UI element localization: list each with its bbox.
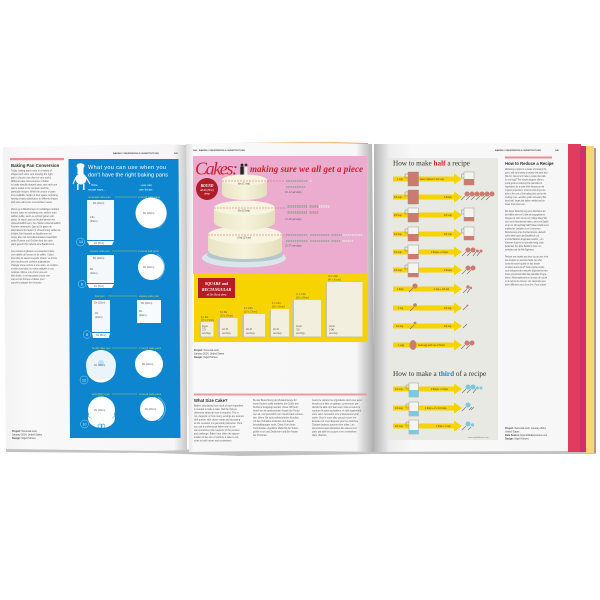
center page article: parts par taille en pouces et en centimètres bbox=[312, 430, 357, 434]
badge: round: all 2in (5cm) bbox=[200, 189, 214, 192]
row: rectangle pan to 2 round pans: 14 bbox=[79, 240, 83, 244]
left page article: to make specific-shaped pans, and each one bbox=[11, 184, 58, 186]
row: 1/4 cup third: 1/4 cup bbox=[395, 425, 404, 428]
center page article: Avant de calculer les ingrédients dont vous avez bbox=[312, 399, 363, 402]
left page article: une variété de formes et de tailles. Il peut bbox=[11, 254, 54, 256]
cake box: 9x9: 40-45 bbox=[246, 328, 253, 331]
left page article: and sizes will cover most kitchen needs. bbox=[11, 201, 53, 204]
illustration: three-tier cake: 10in (25cm) bbox=[237, 236, 251, 240]
row: square pan to round pan: 2 round loaf pans bbox=[138, 249, 159, 253]
left page article: passt. Je nach Land und Kultur werden sie bbox=[11, 218, 56, 222]
center page article: and challenge. Baker here offers the approx- bbox=[194, 432, 240, 436]
row: bundt pan to round pans: 2 round cake pans bbox=[139, 346, 162, 350]
right page article: Réduire une recette par deux ou par trois n'est bbox=[505, 255, 549, 259]
row: loaf pan to square pan: (20cm) bbox=[139, 314, 147, 317]
row: rectangle pan to 2 round pans: 13in bbox=[90, 216, 95, 219]
right page bbox=[374, 143, 568, 452]
right page article: How to Reduce a Recipe bbox=[505, 161, 554, 166]
cake box: 8x12: 40-45 bbox=[273, 328, 280, 331]
blue panel title: What you can use when you bbox=[88, 165, 166, 171]
right page article: et du temps de cuisson, une casserole peut bbox=[505, 280, 546, 283]
left page article: riesig, aber mit Grundkenntnissen beachtlich bbox=[11, 236, 58, 239]
cake box: 8x12: servings bbox=[273, 332, 282, 335]
right page article: sorgt um 10 beschlägt hält? Diese Grafik ist ein bbox=[505, 224, 550, 227]
right page article: point, and so knowing to reduce the pans and bbox=[505, 171, 548, 175]
right page article: doses proportionnelles des quantités d'ingré- bbox=[505, 273, 547, 276]
row: 1 egg bbox=[393, 340, 474, 350]
right page article: ingredients for a cake while keeping to the bbox=[505, 185, 545, 189]
row: square pan to round pan: 8in bbox=[90, 268, 94, 271]
center page article: Bei der Berechnung der Zutatenmenge für bbox=[253, 399, 297, 402]
row: square pan to round pan: 8in (20cm) bbox=[93, 257, 104, 260]
left page article: vue sur les formes et tailles pour bbox=[11, 278, 45, 281]
row: bundt pan to round pans: 12 bbox=[82, 378, 86, 382]
center page article: Bakers calculating how much of each ingredient bbox=[194, 404, 244, 408]
left page article: couvrir la plupart des besoins. bbox=[11, 282, 42, 284]
cake box: 8x12: (20 x 30cm) bbox=[272, 306, 285, 308]
icon: chef bbox=[73, 163, 90, 190]
center page bbox=[186, 142, 375, 452]
center page article: not, depends on how many servings are desired, bbox=[194, 415, 245, 418]
right page article: aider différents vous d'une fine. Pour cuisine. bbox=[505, 283, 547, 287]
row: springform pan to round pans: 2 round cake pans bbox=[139, 392, 162, 396]
center page credits bbox=[194, 349, 225, 359]
top coloured page edge bbox=[238, 142, 368, 145]
row: springform pan to round pans: 9in (23cm) bbox=[145, 408, 156, 411]
right page article: vorhalten auf die Alle Eigentum. bbox=[505, 248, 535, 252]
left page article: pan to choose can often be very useful. bbox=[11, 176, 52, 180]
cake box: 8x8: (20 x 20cm) bbox=[220, 314, 233, 318]
panel: round cakes bbox=[193, 156, 367, 273]
row: 1/3 cup: 1/3 cup bbox=[394, 251, 403, 254]
row: 1/4 cup: 2 tbsps bbox=[444, 269, 453, 272]
row: bundt pan to round pans: 9in (23cm) bbox=[94, 364, 105, 367]
row: 1/3 cup third bbox=[393, 402, 474, 416]
row: 1 egg: 1 egg bbox=[398, 344, 405, 347]
cake box: 11x15: about bbox=[296, 325, 302, 328]
row: loaf pan to square pan: (23cm) bbox=[95, 316, 103, 319]
cake box: 16x24: (41 x 61cm) bbox=[328, 278, 341, 282]
badge: square and rectangular: RECTANGULAR bbox=[202, 287, 232, 292]
right page article: comment savoir quand on faut diviser bbox=[505, 262, 540, 266]
left page header: BAKING CONVERSIONS & SUBSTITUTIONS bbox=[113, 153, 159, 155]
badge: round: deep bbox=[204, 192, 210, 196]
right page article: able to the cost of the baking that can be the bbox=[505, 192, 547, 196]
center page article: sizes in both inches and centimeters. bbox=[194, 440, 233, 442]
badge: round bbox=[196, 178, 218, 200]
right page article: die Hälfte oder ein Drittel der angegebenen bbox=[505, 213, 546, 217]
row: loaf pan to square pan: 8in bbox=[139, 310, 143, 313]
center page article: größe in cm und Zentimeter und die Anzahl bbox=[253, 430, 298, 434]
row: square pan to round pan: 2in (5cm) bbox=[94, 285, 104, 288]
cake box: 6x6: servings bbox=[202, 332, 211, 335]
row: 3/4 cup bbox=[393, 190, 494, 204]
cake box: 6x6: about bbox=[202, 325, 208, 328]
center page article: with guests: with choice made and according bbox=[194, 418, 241, 422]
row: loaf pan to square pan: 5in (13cm) bbox=[94, 302, 105, 304]
row: square pan to round pan: 9in (23cm) bbox=[143, 266, 154, 269]
cake box: 16x24: 16 x 24in bbox=[328, 275, 339, 278]
left page article: Baking Pan Conversion bbox=[11, 163, 60, 168]
chart: round cake servings: 10-12 servings bbox=[285, 191, 302, 194]
right page article: cooking time—another guide necessary! But bbox=[505, 196, 547, 199]
left page article: Today, baking pans come in a variety of bbox=[11, 170, 52, 172]
cake box: 6x6: (15 x 15cm) bbox=[201, 319, 214, 322]
row: 1/4 cup third: 1 tbsp + 1 tsp bbox=[436, 425, 451, 428]
row: loaf pan to square pan: square cake pan bbox=[139, 294, 159, 298]
illustration: three-tier cake: 6in (15cm) bbox=[238, 182, 250, 186]
left page article: ganz gerecht für nahezu eine Backformen. bbox=[11, 243, 55, 246]
right page credits: Design: Nigel Holmes bbox=[505, 438, 529, 440]
left page credits: Project: Personal work, bbox=[12, 430, 38, 433]
left page article: recettes. Même si le choix vous est bbox=[11, 271, 48, 274]
cake box: 9x9: (23 x 25cm) bbox=[244, 310, 257, 314]
left page article: kommt, kann es schwierig sein, welche man bbox=[11, 212, 57, 214]
row: bundt pan to round pans: 9in (23cm) bbox=[142, 363, 153, 366]
center page article: Anteil der die gewünschten Anzahl der Portio- bbox=[253, 410, 300, 412]
center page article: dans chacune. bbox=[312, 435, 327, 437]
row: 2/3 cup: 1/3 cup bbox=[444, 214, 453, 217]
row: 2/3 cup: 2/3 cup bbox=[394, 214, 403, 217]
cake box: 11x15 bbox=[292, 293, 321, 338]
column headers: If the bbox=[91, 183, 98, 187]
left page article: unterschiedlich sein, ihre Stellen unterschiedlich bbox=[11, 222, 61, 225]
cake box: 8x12: 8 x 12in bbox=[272, 302, 281, 305]
left page article: from available height of their space confusing, bbox=[11, 194, 59, 197]
right page article: bedenken Sie: Eine Backform kann nur bbox=[505, 245, 542, 248]
panel: baking pan substitutions bbox=[68, 159, 180, 438]
row: rectangle pan to 2 round pans: 2in (5cm) bbox=[94, 242, 104, 245]
row: 1/3 cup third: 1/3 cup bbox=[395, 407, 404, 410]
center page article: einen Kuchen sollte zunächst die Größe des bbox=[253, 402, 300, 406]
blue panel title: don't have the right baking pans bbox=[88, 172, 168, 178]
row: loaf pan to square pan bbox=[83, 294, 161, 338]
row: springform pan to round pans: springform pan bbox=[92, 392, 110, 396]
right page article: Bei dieser Reduzierung eines Rezeptes auf bbox=[505, 210, 546, 213]
center page credits: January 2014, United States bbox=[194, 352, 225, 356]
center page article: varier. Voici le vous allez pouvoir suivre est bbox=[312, 416, 357, 420]
row: 1/4 cup: 1/4 cup bbox=[394, 269, 403, 272]
row: 1/3 cup third: 1 tbsp + 2 x 1/3 tsps bbox=[425, 407, 447, 410]
cake box: 11x15: 50 bbox=[296, 328, 300, 332]
cake box: 6x6 bbox=[199, 316, 214, 338]
row: rectangle pan to 2 round pans: 9in (23cm) bbox=[143, 212, 154, 215]
center page article: dimensions approximatives des pièces sont bbox=[312, 427, 357, 430]
row: 1/2 tsp: 1/2 tsp bbox=[396, 325, 404, 328]
column headers: use these: bbox=[139, 188, 153, 192]
right page header: 345 bbox=[555, 149, 559, 152]
left page credits bbox=[12, 430, 43, 440]
row: springform pan to round pans: 9in (23cm) bbox=[94, 409, 105, 412]
row: 1/4 cup bbox=[393, 263, 476, 277]
panel: square and rectangular cakes bbox=[194, 273, 368, 342]
center page article: determine what pan size is required. This is bbox=[194, 412, 240, 414]
center page article: nombre de parts souhaitées, et selle également bbox=[312, 410, 361, 412]
right page article: nicht nicht Verständnis haben, wenn ein Eigelb bbox=[505, 220, 549, 224]
cake box: 11x15: 11 x 15in bbox=[296, 293, 306, 296]
left page article: changer d'une culture à une autre, et certains bbox=[11, 264, 59, 267]
column headers bbox=[88, 183, 153, 192]
row: 1 tsp: 1 tsp bbox=[398, 307, 404, 310]
left page article: particular recipes. While the choice of pans bbox=[11, 190, 56, 194]
right page article: praktischer Leitfaden zum Umrechnen. bbox=[505, 227, 541, 231]
heading: how to make half a recipe: How to make half a recipe bbox=[393, 160, 470, 168]
cake title bbox=[195, 158, 363, 178]
row: springform pan to round pans: 10 bbox=[82, 422, 86, 426]
chart: round cake servings: 15-20 servings bbox=[285, 218, 302, 221]
row: 1/2 cup: 1/2 cup bbox=[394, 233, 403, 236]
left page article: alternativen Rezepten in Umrechnung selbst die bbox=[11, 229, 61, 232]
left page header: 343 bbox=[174, 152, 178, 155]
row: 1 tsp: 1/2 tsp bbox=[444, 307, 452, 310]
row: rectangle pan to 2 round pans bbox=[76, 195, 167, 246]
cake box: 11x15: servings bbox=[296, 332, 305, 335]
right page article: quick guide to reducing the quantities of bbox=[505, 182, 542, 185]
row: 1/4 cup third bbox=[393, 420, 474, 434]
illustration: three-tier cake: 9in (23cm) bbox=[238, 210, 250, 212]
panel: recipe halves and thirds bbox=[388, 158, 498, 440]
left page article: Different pans hold volumes of batter bbox=[11, 180, 49, 183]
left page article bbox=[10, 158, 64, 284]
cake box: 8x8: 8 x 8in bbox=[220, 311, 228, 314]
left page article: pan is suited to the occasion and the bbox=[11, 187, 49, 190]
row: 1/2 tsp: 1/4 tsp bbox=[444, 325, 452, 328]
center page article: Tortenboden ungefähre Maße für die Torten- bbox=[253, 427, 299, 430]
row: 3/4 cup: 3/4 cup bbox=[394, 196, 403, 199]
row: bundt pan to round pans: bundt cake pan bbox=[92, 346, 111, 350]
center page article: as the occasion is a personal preference. Here bbox=[194, 422, 243, 425]
badge: square and rectangular: SQUARE and bbox=[205, 281, 229, 286]
badge: square and rectangular: all 2in (5cm) deep bbox=[207, 294, 227, 296]
center page article: What Size Cake? bbox=[194, 398, 228, 403]
right page article: little bit: how to turn halve a recipe that calls bbox=[505, 175, 546, 178]
cake box: 8x8 bbox=[218, 311, 238, 338]
right page article: for one egg? This simple diagram offers a bbox=[505, 178, 544, 182]
book shadow bbox=[6, 449, 596, 456]
right page credits: Project: Personal work, January 2014, bbox=[505, 427, 547, 430]
column headers: ...you can bbox=[139, 183, 152, 187]
chart: round cake servings: 25-35 servings bbox=[285, 244, 302, 248]
row: 1/2 cup third: 1/2 cup bbox=[395, 388, 404, 391]
row: loaf pan to square pan: 9in bbox=[95, 312, 99, 315]
center page article: D'autres aspects pourront être utiles. Les bbox=[312, 424, 355, 426]
cake box: 16x24: about bbox=[329, 325, 335, 328]
left page article: des moules pour contenir adaptations bbox=[11, 260, 51, 264]
right page credits: Data Source: Epicurilla/Epicurious.com bbox=[505, 434, 547, 437]
cake box: 8x8: servings bbox=[222, 332, 231, 335]
center page article: der Portionen. bbox=[253, 434, 268, 437]
right page article: original proportions. Inherent should you be bbox=[505, 189, 546, 192]
badge: round: ROUND bbox=[201, 184, 214, 188]
row: 1/2 cup bbox=[393, 227, 474, 241]
icon: bride and groom topper bbox=[240, 164, 248, 178]
center page article: den. Wenn Sie sich professionellen Konditor, bbox=[253, 416, 300, 420]
center page article: can sometimes other aspects of the process bbox=[194, 429, 240, 432]
row: 1/2 cup third: 2 tbsps + 2 tsps bbox=[431, 388, 449, 391]
row: 1/3 cup bbox=[393, 245, 482, 259]
left page credits: Design: Nigel Holmes bbox=[12, 437, 36, 440]
right page article: sollte dabei auch das Backblech und bbox=[505, 234, 540, 238]
badge: square and rectangular bbox=[198, 278, 235, 298]
left page article: être utile de savoir lesquels choisir. La forme bbox=[11, 257, 58, 260]
left page article: moules sont plus ou moins adaptés à vos bbox=[11, 268, 55, 270]
center page article: nen ab, und persönlich vom Geschmack verwen- bbox=[253, 413, 304, 416]
row: 1 egg: beat egg and use 2 tbsps bbox=[418, 344, 446, 347]
center page credits: Design: Nigel Holmes bbox=[194, 356, 218, 359]
right page article: Reduzierung eines Kuchenrezepts, dadurch bbox=[505, 231, 547, 234]
row: 2/3 cup bbox=[393, 208, 474, 222]
right page article: pas toujours un exercice facile. En effet, bbox=[505, 259, 543, 262]
center page article: Ensuite voir vous disposez pour les tranches bbox=[312, 420, 359, 423]
row: 1 tbsp: 1 tbsp bbox=[397, 288, 404, 291]
right page article: better than place one. bbox=[505, 203, 526, 206]
blue panel title bbox=[88, 165, 168, 178]
center page article: décider la taille qu'il faut avoir. Cela va selon le bbox=[312, 406, 361, 409]
right page credits: United States bbox=[505, 430, 520, 434]
source line: www.nigelholmes.com bbox=[468, 437, 489, 439]
cake box: 9x9: servings bbox=[246, 332, 255, 335]
cake box: 8x12 bbox=[269, 302, 289, 338]
left page bbox=[3, 144, 187, 451]
row: rectangle pan to 2 round pans: 2 round cake pans bbox=[138, 195, 161, 199]
row: 1/2 cup: 1/4 cup bbox=[444, 233, 453, 236]
row: loaf pan to square pan: 8 bbox=[86, 333, 88, 337]
right page article: Kleinerer Kuchen ist schneller fertig, doch bbox=[505, 241, 544, 245]
center page credits: Project: Personal work, bbox=[194, 349, 220, 352]
center page article: beschäftigungen sucht. Diese Form beim bbox=[253, 424, 295, 426]
row: bundt pan to round pans bbox=[80, 346, 163, 384]
cake box: 16x24 bbox=[325, 275, 362, 338]
row: rectangle pan to 2 round pans: (33cm) bbox=[90, 220, 98, 223]
cake box: 9x9: 9 x 10in bbox=[244, 307, 253, 310]
center page article: is needed to bake a cake, find the thing is bbox=[194, 408, 238, 411]
left page article: Inhalte. Die Auswahl an Backformen ist bbox=[11, 232, 52, 236]
center page article: besoin pour faire un gâteau, commencez par bbox=[312, 402, 358, 406]
right page article: Reducing a recipe is a matter of knowing the bbox=[505, 168, 547, 171]
center page article bbox=[194, 394, 367, 442]
row: square pan to round pan bbox=[78, 249, 165, 288]
right page article: combien aurez-vous? Cette courbe simple bbox=[505, 266, 545, 269]
left page article: having a basic substitution in different shapes bbox=[11, 198, 59, 200]
center page article: imation of the size of portions a cake to cut, bbox=[194, 436, 239, 439]
left page article: wählen sollte, wenn es schnell gehen soll, bbox=[11, 215, 55, 218]
row: loaf pan to square pan: 3in (8cm) bbox=[96, 334, 106, 337]
right page article bbox=[505, 156, 554, 287]
right page article: und die Backzeit angepasst werden – ein bbox=[505, 238, 544, 241]
left page article: Formen verwendet. Das ist für ganz ein bbox=[11, 226, 52, 228]
column headers: recipe says... bbox=[88, 188, 106, 192]
center page article: Kuchens festgelegt werden. Diese hilft beim bbox=[253, 406, 298, 409]
row: 1 tbsp bbox=[393, 283, 472, 294]
row: 1 tbsp: 1 tsp + 1/2 tsp bbox=[434, 288, 450, 291]
page edges: coloured stack on right bbox=[568, 144, 596, 453]
right page article: dients. Nécessairement en fonction de moule bbox=[505, 276, 548, 280]
row: 1/3 cup: 2 tbsps + 2 tsps bbox=[431, 251, 449, 254]
row: springform pan to round pans bbox=[80, 392, 165, 428]
row: 1 cup: 1 cup bbox=[397, 178, 404, 181]
row: 3/4 cup: 6 tbsps bbox=[444, 196, 453, 199]
left page article: vieler Formen und Größen sind die oben bbox=[11, 240, 54, 242]
right page header: BAKING CONVERSIONS & SUBSTITUTIONS bbox=[495, 150, 541, 152]
row: 1 tsp bbox=[393, 302, 468, 314]
left page article: Wenn es in Backformen zu unzähligen Größen bbox=[11, 208, 60, 211]
left page article: shapes and sizes, and knowing the right bbox=[11, 173, 53, 176]
cake box: 6x6: 15 bbox=[202, 328, 206, 332]
right page article: hand half, forget that baker needed and be bbox=[505, 199, 545, 203]
row: square pan to round pan: (20cm) bbox=[90, 272, 98, 275]
cake box: 8x8: 22-30 bbox=[222, 328, 229, 331]
cake box: 16x24: 100 bbox=[329, 328, 334, 332]
row: loaf pan to square pan: 8in (20cm) bbox=[141, 302, 152, 305]
left page credits: January 2014, United States bbox=[12, 434, 43, 436]
center page article: mit das Verhältnis zwischen den Aspekt bbox=[253, 420, 294, 423]
cake box: 16x24: servings bbox=[329, 332, 338, 335]
right page article: vous indiquera des mesures d'ajustement des bbox=[505, 269, 548, 273]
row: 1/2 cup third bbox=[393, 383, 482, 397]
row: rectangle pan to 2 round pans: 9in (23cm) bbox=[93, 202, 104, 205]
row: loaf pan to square pan: loaf pan bbox=[95, 294, 105, 298]
cake box: 9x9 bbox=[242, 307, 265, 338]
heading: how to make a third of a recipe: How to make a third of a recipe bbox=[393, 370, 486, 378]
illustration: three-tier cake bbox=[202, 174, 286, 268]
row: 1 cup: when halved = 1/2 cup bbox=[420, 178, 445, 181]
chart: round cake servings bbox=[285, 178, 363, 248]
center page article: you can a professional baker who is one bbox=[194, 426, 236, 428]
cake title: making sure we all get a piece bbox=[250, 164, 363, 174]
right page article: Mengen ist nicht immer ein richtige Weg! Wer bbox=[505, 217, 548, 220]
row: 1 cup bbox=[393, 172, 474, 186]
cake title: Cakes: bbox=[195, 158, 238, 178]
center page article: varie selon l'occasion et le professionnel peut bbox=[312, 413, 359, 416]
cake box: 11x15: (28 x 38cm) bbox=[296, 296, 309, 300]
right page credits bbox=[505, 427, 547, 440]
center page header: BAKING CONVERSIONS & SUBSTITUTIONS bbox=[199, 149, 245, 152]
cake box: 6x6: 6 x 6in bbox=[201, 316, 209, 319]
left page article: Les moules à gâteaux se présentent dans bbox=[11, 250, 55, 253]
row: square pan to round pan: 8 bbox=[81, 282, 83, 286]
row: 1/2 tsp bbox=[393, 320, 467, 332]
row: square pan to round pan: square cake pan bbox=[90, 249, 110, 253]
center page header: 344 bbox=[193, 150, 197, 152]
left page article: bien limité, il est important d'avoir une bbox=[11, 274, 51, 278]
row: rectangle pan to 2 round pans: rectangle cake pan bbox=[88, 195, 111, 199]
